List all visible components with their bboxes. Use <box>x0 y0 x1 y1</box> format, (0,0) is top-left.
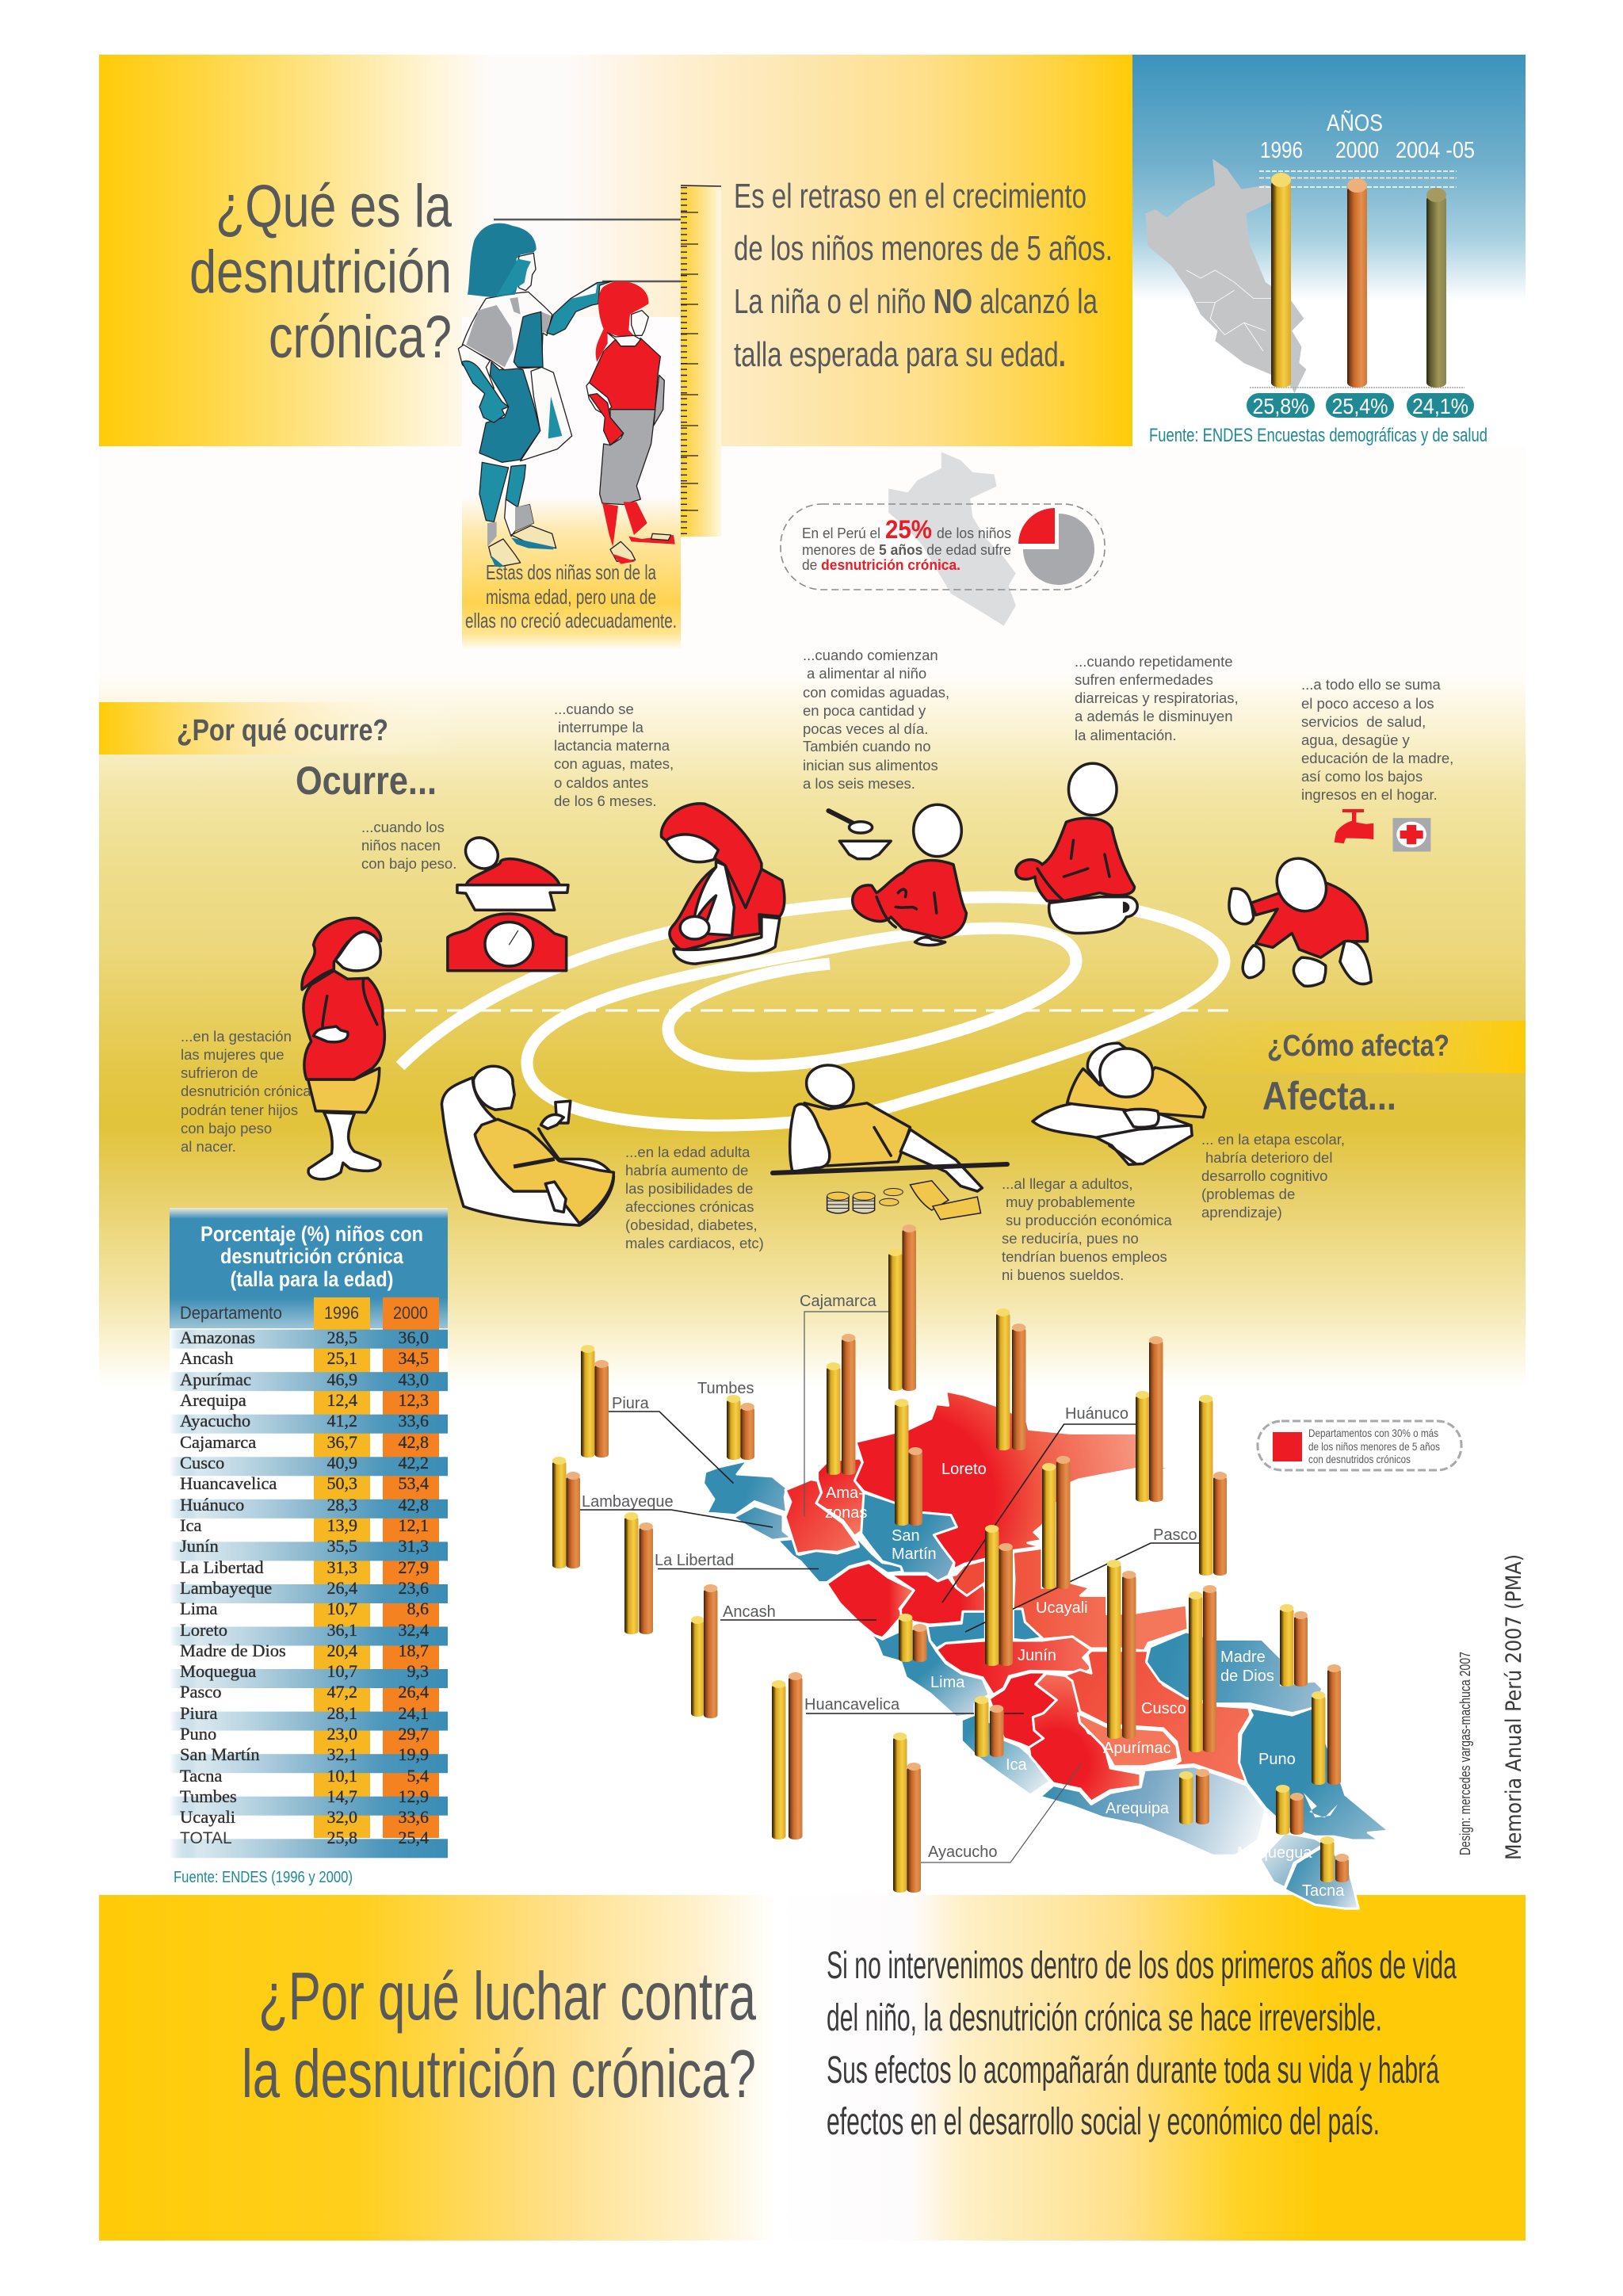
table rows: 25,1 <box>327 1348 357 1368</box>
text: limited access to services: ...a todo ello se suma <box>1301 676 1442 693</box>
caption under girls: ellas no creció adecuadamente. <box>465 609 677 632</box>
table rows: 14,7 <box>327 1786 357 1806</box>
callout: 25% of children <box>781 452 1105 626</box>
table rows: 12,1 <box>398 1515 429 1535</box>
map region labels: Martín <box>892 1545 937 1563</box>
value pills: 24,1% <box>1412 394 1468 418</box>
bars: Ucayali <box>1042 1456 1070 1589</box>
table rows: 42,2 <box>398 1453 429 1473</box>
definition text: talla esperada para su edad. <box>734 335 1066 374</box>
text: breastfeeding interrupted: lactancia materna <box>554 737 670 754</box>
callout text: menores de 5 años de edad sufre <box>802 541 1011 558</box>
alternating row bands <box>170 1330 448 1858</box>
bars: Tacna <box>1320 1836 1349 1882</box>
table rows: 31,3 <box>398 1536 429 1556</box>
value pills: 25,4% <box>1331 394 1388 418</box>
bars: Moquegua <box>1276 1785 1304 1835</box>
text: limited access to services: agua, desagüe y <box>1301 732 1411 748</box>
map region labels: Ucayali <box>1036 1599 1088 1617</box>
year labels: AÑOS <box>1327 109 1383 136</box>
bars: Cusco <box>1189 1585 1216 1752</box>
definition text <box>734 177 1113 374</box>
table rows: Ancash <box>180 1348 233 1368</box>
table rows: Moquegua <box>180 1661 256 1681</box>
text: early feeding: a alimentar al niño <box>807 665 926 682</box>
text: adult chronic illness: habría aumento de <box>625 1162 748 1179</box>
height ruler <box>681 185 721 537</box>
table rows: 12,9 <box>398 1786 429 1806</box>
illustration: tall girl in teal <box>458 223 612 567</box>
table title: Porcentaje (%) niños con <box>200 1222 423 1246</box>
callout text <box>802 515 1011 573</box>
text: adults economic production: ni buenos sueldos. <box>1002 1266 1124 1283</box>
table rows: 42,8 <box>398 1432 429 1452</box>
map callout labels: Huancavelica <box>804 1696 900 1713</box>
panel: table of percentages by department <box>170 1208 448 1858</box>
map region labels: Loreto <box>941 1461 987 1478</box>
height guide lines <box>494 220 681 281</box>
text: gestation: ...en la gestación <box>181 1028 292 1045</box>
definition text: de los niños menores de 5 años. <box>734 229 1113 268</box>
bars: Tumbes <box>727 1395 754 1460</box>
map region labels: Ica <box>1006 1756 1028 1774</box>
table rows: 5,4 <box>407 1766 429 1786</box>
table rows: San Martín <box>180 1744 260 1764</box>
designer credit: Design: mercedes vargas-machuca 2007 <box>1457 1652 1473 1855</box>
table rows: 36,7 <box>327 1432 357 1452</box>
table rows: 33,6 <box>398 1411 429 1431</box>
table title: (talla para la edad) <box>230 1267 393 1291</box>
bars: Arequipa <box>1179 1769 1209 1824</box>
map region labels: Madre <box>1220 1648 1266 1666</box>
bars: Loreto <box>996 1308 1025 1450</box>
table rows: Madre de Dios <box>180 1641 286 1660</box>
chart: stunting by year over Peru map: 1996 <box>1260 138 1303 163</box>
text: limited access to services: educación de la madre, <box>1301 750 1453 766</box>
definition text: La niña o el niño NO alcanzó la <box>734 282 1098 321</box>
map department lines <box>1186 270 1273 351</box>
bars: Lima <box>899 1614 927 1662</box>
table rows: Ayacucho <box>180 1411 250 1431</box>
north coast departments <box>704 1461 792 1540</box>
table rows: 10,1 <box>327 1766 357 1786</box>
callout text: de los niños <box>937 525 1011 541</box>
table rows: 42,8 <box>398 1495 429 1515</box>
heading band: ¿Cómo afecta? <box>1173 1021 1526 1073</box>
bars: Piura <box>581 1345 609 1457</box>
map callout labels: Piura <box>612 1395 650 1412</box>
bottom heading: ¿Por qué luchar contra <box>258 1959 757 2034</box>
light Peru map <box>888 452 1016 626</box>
text: school stage: aprendizaje) <box>1201 1204 1282 1221</box>
map region labels: Ama- <box>826 1484 864 1502</box>
column headings <box>180 1303 428 1323</box>
map region labels: Apurímac <box>1103 1740 1171 1757</box>
table title: desnutrición crónica <box>220 1244 404 1268</box>
table source: Fuente: ENDES (1996 y 2000) <box>174 1869 353 1886</box>
text: adults economic production: su producción económica <box>1006 1212 1172 1228</box>
table title <box>200 1222 423 1291</box>
icon: health cross <box>1393 818 1430 851</box>
figure: student reading <box>1033 1043 1205 1164</box>
table rows: Amazonas <box>180 1328 255 1347</box>
publication credit: Memoria Anual Perú 2007 (PMA) <box>1502 1554 1526 1860</box>
column headings: 1996 <box>324 1303 359 1323</box>
title: ¿Qué es la desnutrición crónica? <box>189 173 453 371</box>
table rows: Junín <box>180 1536 219 1556</box>
text: school stage: habría deterioro del <box>1205 1149 1332 1166</box>
bars: Pasco <box>1199 1395 1227 1576</box>
map region labels: de Dios <box>1220 1668 1274 1685</box>
table rows: 28,3 <box>327 1495 357 1515</box>
title: ¿Qué es la desnutrición crónica?: ¿Qué es la <box>216 173 453 240</box>
bars: La Libertad <box>624 1512 653 1634</box>
text: adults economic production: tendrían buenos empleos <box>1002 1248 1167 1265</box>
text: repeated illness: ...cuando repetidamente <box>1075 653 1233 670</box>
table rows: 41,2 <box>327 1411 357 1431</box>
definition text: Es el retraso en el crecimiento <box>734 177 1086 216</box>
year columns <box>314 1297 370 1838</box>
bars: Junín <box>985 1525 1013 1666</box>
white table body <box>170 1328 448 1858</box>
chart source: Fuente: ENDES Encuestas demográficas y de salud <box>1149 425 1487 446</box>
map region labels: Arequipa <box>1106 1800 1170 1817</box>
text: gestation: las mujeres que <box>181 1046 285 1063</box>
text: gestation: podrán tener hijos <box>181 1102 298 1118</box>
map region labels: Puno <box>1258 1751 1296 1768</box>
map of Peru by department <box>704 1387 1389 1908</box>
caption under girls: misma edad, pero una de <box>486 585 656 609</box>
text: school stage: desarrollo cognitivo <box>1201 1167 1327 1184</box>
table rows: La Libertad <box>180 1557 264 1577</box>
text: school stage <box>1201 1131 1345 1221</box>
table rows: 9,3 <box>407 1661 429 1681</box>
caption under girls <box>465 560 677 632</box>
map callout labels <box>582 1293 1197 1861</box>
table rows: Lambayeque <box>180 1578 272 1598</box>
table rows: 50,3 <box>327 1473 357 1493</box>
table header <box>170 1208 448 1328</box>
figure: adult in armchair <box>441 1066 613 1225</box>
table rows: 28,1 <box>327 1703 357 1723</box>
bottom heading <box>242 1959 757 2112</box>
text: limited access to services: servicios de salud, <box>1301 713 1426 730</box>
figure: baby being fed <box>828 804 966 946</box>
text: early feeding: ...cuando comienzan <box>803 647 938 663</box>
table rows: 53,4 <box>398 1473 429 1493</box>
heading band: ¿Por qué ocurre? <box>99 702 464 755</box>
text: adults economic production: se reduciría, pues no <box>1002 1230 1139 1247</box>
column headings: Departamento <box>180 1303 282 1323</box>
bottom text <box>827 1945 1457 2143</box>
table rows: Apurímac <box>180 1370 251 1389</box>
map region labels <box>825 1461 1345 1900</box>
table rows: 36,1 <box>327 1620 357 1640</box>
text: early feeding: a los seis meses. <box>803 775 915 792</box>
map bars by department <box>552 1224 1349 1893</box>
title: ¿Qué es la desnutrición crónica?: desnutrición <box>189 239 452 306</box>
heading: Ocurre...: Ocurre... <box>296 758 437 803</box>
table rows: 28,5 <box>327 1328 357 1347</box>
text: adult chronic illness <box>625 1144 764 1251</box>
table rows: Huánuco <box>180 1495 244 1515</box>
text: breastfeeding interrupted: ...cuando se <box>554 701 634 717</box>
text: gestation: con bajo peso <box>181 1120 272 1137</box>
table rows: Lima <box>180 1599 217 1618</box>
bars: Puno <box>1312 1664 1341 1785</box>
legend: con desnutridos crónicos <box>1308 1453 1411 1465</box>
map region labels: Lima <box>930 1674 965 1691</box>
table rows: 26,4 <box>327 1578 357 1598</box>
bar 2000 <box>1347 178 1367 388</box>
text: school stage: ... en la etapa escolar, <box>1201 1131 1345 1148</box>
column headings: 2000 <box>393 1303 428 1323</box>
text: early feeding: También cuando no <box>803 738 930 755</box>
table rows: 25,8 <box>327 1828 357 1847</box>
table rows: 33,6 <box>398 1807 429 1827</box>
chart: stunting by year over Peru map: 2000 <box>1335 138 1379 163</box>
text: repeated illness: la alimentación. <box>1075 727 1177 743</box>
bottom panel background <box>99 1895 1526 2241</box>
table rows: 34,5 <box>398 1348 429 1368</box>
central departments <box>777 1387 1188 1801</box>
text: limited access to services: así como los bajos <box>1301 768 1423 785</box>
text: limited access to services: ingresos en el hogar. <box>1301 786 1438 803</box>
map callout labels: Cajamarca <box>800 1293 877 1310</box>
table rows: 43,0 <box>398 1370 429 1389</box>
text: gestation <box>181 1028 311 1155</box>
text: early feeding: inician sus alimentos <box>803 757 938 774</box>
title: ¿Qué es la desnutrición crónica?: crónica? <box>269 304 452 371</box>
table rows: 36,0 <box>398 1328 429 1347</box>
bars: Ayacucho <box>893 1733 921 1893</box>
map region labels: Tacna <box>1302 1882 1345 1900</box>
text: adult chronic illness: las posibilidades de <box>625 1180 753 1197</box>
text: low birth weight <box>361 819 456 872</box>
text: breastfeeding interrupted: de los 6 meses. <box>554 793 657 809</box>
text: limited access to services: el poco acceso a los <box>1301 695 1434 712</box>
text: repeated illness <box>1075 653 1239 743</box>
map callout labels: Huánuco <box>1065 1405 1128 1423</box>
text: breastfeeding interrupted: o caldos antes <box>554 774 648 791</box>
life-cycle spiral <box>400 897 1224 1125</box>
bars: Ancash <box>691 1584 718 1718</box>
map callout labels: Ayacucho <box>928 1843 997 1861</box>
table rows: 31,3 <box>327 1557 357 1577</box>
map callout labels: Ancash <box>723 1603 776 1621</box>
table rows: Pasco <box>180 1682 222 1702</box>
text: low birth weight: niños nacen <box>361 837 441 854</box>
bars: Madre de Dios <box>1280 1604 1308 1687</box>
table rows: 26,4 <box>398 1682 429 1702</box>
table rows: 10,7 <box>327 1661 357 1681</box>
pie chart <box>1018 508 1094 585</box>
map region labels: zonas <box>825 1504 867 1522</box>
value pills: 25,8% <box>1252 394 1309 418</box>
text: breastfeeding interrupted: interrumpe la <box>558 719 644 735</box>
top panel: gold gradient background <box>99 55 1132 446</box>
text: gestation: sufrieron de <box>181 1064 258 1081</box>
text: gestation: desnutrición crónica <box>181 1083 311 1099</box>
figure: baby on a scale <box>448 833 568 971</box>
illustration: short girl in red <box>586 281 675 564</box>
text: early feeding: con comidas aguadas, <box>803 684 949 701</box>
blue panel background <box>1132 55 1526 300</box>
table rows: Cajamarca <box>180 1432 256 1452</box>
table rows: 25,4 <box>398 1828 429 1847</box>
heading band: ¿Por qué ocurre?: ¿Por qué ocurre? <box>177 714 388 747</box>
text: adult chronic illness: (obesidad, diabetes, <box>625 1217 758 1233</box>
table rows: 10,7 <box>327 1599 357 1618</box>
bars: Amazonas <box>827 1334 856 1475</box>
figure: sick baby on potty <box>1016 763 1137 934</box>
text: adult chronic illness: ...en la edad adulta <box>625 1144 750 1160</box>
legend: Departamentos con 30% o más <box>1308 1427 1438 1439</box>
text: adults economic production <box>1002 1175 1172 1283</box>
table rows: 35,5 <box>327 1536 357 1556</box>
bar 2004-05 <box>1426 188 1446 388</box>
bars: Ica <box>975 1696 1003 1757</box>
text: early feeding: en poca cantidad y <box>803 702 926 719</box>
bars: Apurímac <box>1107 1560 1136 1739</box>
bar 1996 <box>1271 173 1291 388</box>
legend <box>1258 1421 1461 1470</box>
table rows: 13,9 <box>327 1515 357 1535</box>
map callout labels: La Libertad <box>655 1552 734 1569</box>
table rows: 29,7 <box>398 1724 429 1744</box>
text: repeated illness: a además le disminuyen <box>1075 708 1233 724</box>
table rows: 12,4 <box>327 1390 357 1410</box>
chart: stunting by year over Peru map: 2004 -05 <box>1396 138 1475 163</box>
table rows: 32,4 <box>398 1620 429 1640</box>
table rows: Piura <box>180 1703 218 1723</box>
bars: Huancavelica <box>772 1672 802 1839</box>
table rows: 27,9 <box>398 1557 429 1577</box>
table rows: Tumbes <box>180 1786 237 1806</box>
text: gestation: al nacer. <box>181 1138 236 1155</box>
text: early feeding <box>803 647 949 792</box>
icon: coins and bills <box>827 1181 981 1220</box>
leader lines <box>580 1312 1199 1862</box>
figure: breastfeeding mother <box>661 804 785 964</box>
southern departments <box>1040 1632 1389 1908</box>
table rows: Puno <box>180 1724 216 1744</box>
text: low birth weight: ...cuando los <box>361 819 445 835</box>
table rows: 24,1 <box>398 1703 429 1723</box>
table rows: 46,9 <box>327 1370 357 1389</box>
table rows: 18,7 <box>398 1641 429 1660</box>
bars: Cajamarca <box>888 1224 916 1391</box>
text: repeated illness: sufren enfermedades <box>1075 671 1213 688</box>
middle section background <box>99 446 1526 1389</box>
table rows: 8,6 <box>407 1599 429 1618</box>
table rows: 23,0 <box>327 1724 357 1744</box>
table rows: 40,9 <box>327 1453 357 1473</box>
map region labels: Cusco <box>1141 1700 1186 1717</box>
text: adult chronic illness: afecciones crónicas <box>625 1198 754 1215</box>
table rows: Arequipa <box>180 1390 246 1410</box>
chart: stunting by year over Peru map <box>1145 109 1487 446</box>
text: early feeding: pocas veces al día. <box>803 720 928 737</box>
value pills <box>1247 393 1474 418</box>
callout text: En el Perú el <box>802 525 880 541</box>
text: repeated illness: diarreicas y respiratorias, <box>1075 690 1239 706</box>
table rows: 19,9 <box>398 1744 429 1764</box>
map region labels: Moquegua <box>1237 1844 1312 1862</box>
callout text: de desnutrición crónica. <box>802 556 960 573</box>
heading band: ¿Cómo afecta?: ¿Cómo afecta? <box>1267 1030 1449 1063</box>
bars: Huánuco <box>1136 1336 1163 1502</box>
text: low birth weight: con bajo peso. <box>361 855 456 872</box>
icon: water tap <box>1335 809 1373 843</box>
table edge <box>773 1164 1007 1173</box>
bars: Lambayeque <box>552 1457 580 1568</box>
map callout labels: Lambayeque <box>582 1493 674 1511</box>
table rows: Ica <box>180 1515 201 1535</box>
table rows: Ucayali <box>180 1807 235 1827</box>
table rows: 47,2 <box>327 1682 357 1702</box>
map of Peru in grey <box>1145 159 1306 393</box>
bottom heading: la desnutrición crónica? <box>242 2037 756 2112</box>
figure: pregnant woman <box>302 918 384 1179</box>
table rows <box>180 1328 429 1847</box>
text: school stage: (problemas de <box>1201 1186 1295 1202</box>
heading: Afecta...: Afecta... <box>1262 1074 1396 1118</box>
table rows: Huancavelica <box>180 1473 277 1493</box>
map callout labels: Tumbes <box>697 1380 754 1397</box>
table rows: 12,3 <box>398 1390 429 1410</box>
legend: de los niños menores de 5 años <box>1308 1440 1440 1453</box>
table rows: TOTAL <box>180 1829 232 1847</box>
text: adult chronic illness: males cardiacos, etc) <box>625 1235 764 1251</box>
table rows: Loreto <box>180 1620 227 1640</box>
figure: adult at table with money <box>790 1065 982 1191</box>
table rows: Cusco <box>180 1453 224 1473</box>
table rows: 32,0 <box>327 1807 357 1827</box>
text: breastfeeding interrupted <box>554 701 674 809</box>
bars: San Martín <box>895 1399 922 1526</box>
table rows: 23,6 <box>398 1578 429 1598</box>
text: breastfeeding interrupted: con aguas, mates, <box>554 755 674 772</box>
figure: crawling baby <box>1229 854 1371 986</box>
text: adults economic production: ...al llegar a adultos, <box>1002 1175 1133 1192</box>
table rows: Tacna <box>180 1766 222 1786</box>
caption under girls: Estas dos niñas son de la <box>486 560 656 584</box>
map region labels: Junín <box>1018 1647 1056 1664</box>
table rows: 20,4 <box>327 1641 357 1660</box>
dashed axis line <box>384 1010 1228 1011</box>
table rows: 32,1 <box>327 1744 357 1764</box>
map callout labels: Pasco <box>1153 1526 1197 1544</box>
text: limited access to services <box>1301 676 1453 803</box>
text: adults economic production: muy probablemente <box>1006 1194 1136 1210</box>
panel: two girls illustration backdrop <box>462 317 681 650</box>
callout text: 25% <box>885 515 932 544</box>
map region labels: San <box>892 1527 920 1545</box>
